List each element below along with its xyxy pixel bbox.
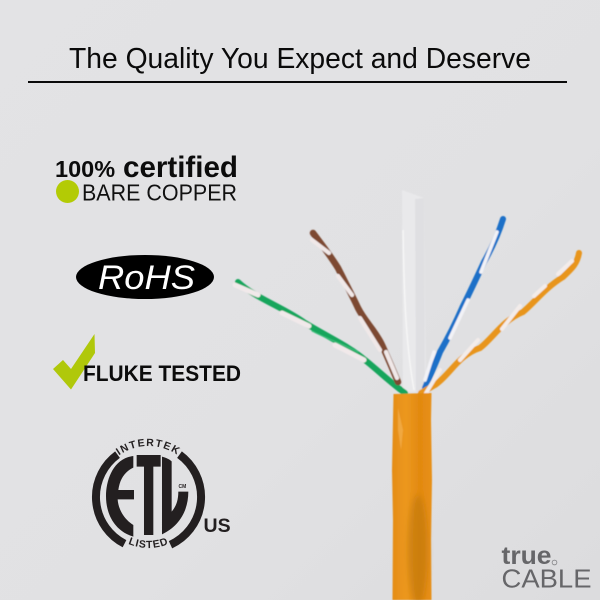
title underline <box>28 81 567 83</box>
title: The Quality You Expect and Deserve <box>69 43 531 75</box>
intertek arc text: INTERTEK <box>116 438 180 455</box>
trueCABLE logo <box>502 542 592 594</box>
trueCABLE logo: true <box>502 542 552 570</box>
cm mark: CM <box>178 484 186 490</box>
clear separator film <box>402 190 426 392</box>
orange pair <box>421 253 579 393</box>
certified heading: certified <box>123 151 238 184</box>
badge: ETL listed logo <box>92 438 231 548</box>
ETL letters <box>106 455 188 537</box>
orange cable jacket <box>392 393 432 600</box>
green pair <box>235 282 405 393</box>
fluke label: FLUKE TESTED <box>83 361 241 386</box>
icon: green dot <box>56 180 79 203</box>
badge: Fluke tested <box>53 334 241 390</box>
listed arc text: LISTED <box>128 537 167 548</box>
trueCABLE logo: CABLE <box>502 564 592 594</box>
badge: RoHS: RoHS <box>98 259 195 297</box>
bare copper label: BARE COPPER <box>82 180 237 206</box>
logo ring <box>96 455 201 545</box>
US mark: US <box>204 515 231 537</box>
blue pair <box>425 219 503 388</box>
icon: check mark <box>53 334 95 390</box>
cable photo <box>235 190 579 600</box>
badge: RoHS <box>76 255 214 299</box>
brown pair <box>312 233 398 382</box>
registered mark <box>552 560 557 565</box>
badge: 100% certified bare copper <box>55 151 238 206</box>
certified heading: 100% <box>55 156 115 182</box>
